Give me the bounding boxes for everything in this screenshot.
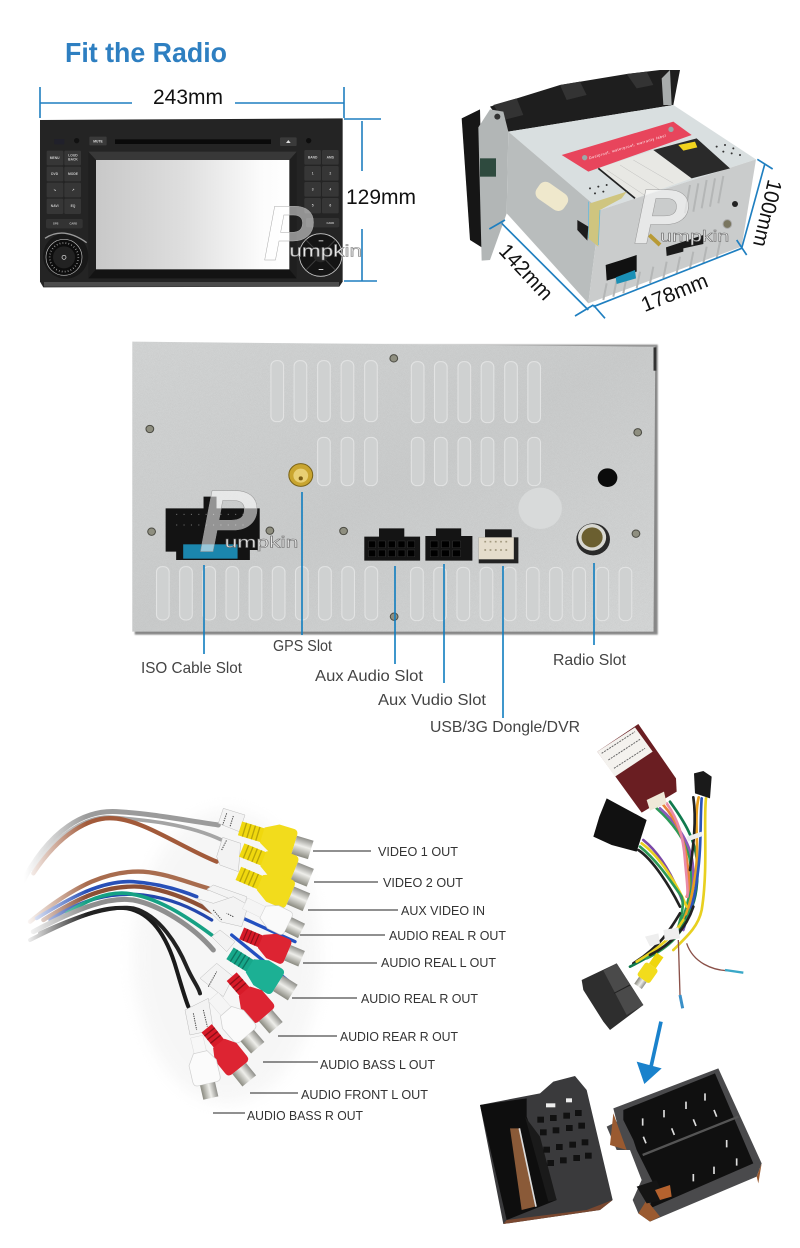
watermark: Pumpkin: P: [263, 189, 314, 277]
RCA plug: aux video white: [239, 892, 307, 942]
wires: [630, 797, 706, 967]
dimension lines on unit: [489, 159, 773, 318]
wiring harness photo: [480, 724, 762, 1224]
white wire tags: [185, 808, 248, 1035]
radio socket: [576, 523, 610, 555]
aux video socket: [425, 528, 472, 561]
watermark: Pumpkin: umpkin: [660, 229, 729, 246]
cable label: AUDIO FRONT L OUT: AUDIO FRONT L OUT: [301, 1088, 428, 1102]
callout line and label: Radio Slot: Radio Slot: [553, 652, 627, 669]
callout line and label: ISO Cable Slot: [141, 565, 243, 677]
left button block: [46, 151, 83, 228]
ISO socket: [166, 497, 260, 560]
right button block: CARD: [326, 221, 334, 225]
right button block: 2: [329, 172, 331, 176]
watermark: Pumpkin: [263, 189, 362, 277]
pale sticker circle: [518, 488, 562, 529]
title: Fit the Radio: [65, 37, 227, 68]
left button block: MODE: [68, 172, 79, 176]
white plug on side: [533, 179, 571, 214]
watermark: Pumpkin: [199, 473, 298, 571]
RCA plug: video 2 yellow: [236, 836, 316, 892]
cable label: AUDIO BASS L OUT: AUDIO BASS L OUT: [320, 1058, 435, 1072]
left button block: NAVI: [51, 204, 59, 208]
left button block: LOUD: [68, 154, 78, 158]
callout line and label: Radio Slot: [553, 563, 627, 669]
head unit front photo: [40, 118, 362, 287]
rear sockets: [666, 235, 703, 256]
callout line and label: Aux Audio Slot: Aux Audio Slot: [315, 668, 424, 685]
RCA plug: yellow third: [232, 859, 312, 916]
black hole: [598, 468, 617, 487]
navigation pad: [299, 234, 342, 276]
GPS gold connector: [289, 464, 313, 486]
RCA plug: audio white bottom: [183, 1034, 224, 1101]
close-up plug right: [607, 1068, 762, 1222]
volume knob: [43, 233, 88, 279]
left button block: EQ: [71, 204, 76, 208]
callout line and label: USB/3G Dongle/DVR: USB/3G Dongle/DVR: [430, 719, 580, 736]
watermark: Pumpkin: P: [633, 172, 689, 260]
yellow RCA: [632, 951, 666, 991]
head unit front photo: MUTE: [93, 139, 103, 143]
screen bezel: [88, 152, 297, 278]
cable label: VIDEO 2 OUT: VIDEO 2 OUT: [383, 876, 463, 890]
side face: [507, 132, 600, 303]
foam edge stack: [588, 192, 627, 247]
dimension: height 129mm: 129mm: [346, 186, 416, 209]
cable label: AUDIO REAL R OUT: AUDIO REAL R OUT: [389, 929, 506, 943]
dimension: width 243mm: 243mm: [153, 86, 223, 109]
left button block: GPS: [53, 222, 59, 226]
right button block: [304, 150, 339, 227]
callout line and label: ISO Cable Slot: ISO Cable Slot: [141, 660, 243, 677]
screws: [146, 355, 642, 620]
left button block: DVD: [51, 172, 59, 176]
right button block: AMS: [327, 156, 335, 160]
RCA plug: audio red bottom: [196, 1020, 260, 1090]
top face: [508, 105, 756, 210]
tag print marks: [193, 813, 233, 1030]
RCA plug: audio white lower: [203, 988, 268, 1057]
cable label: AUDIO REAR R OUT: AUDIO REAR R OUT: [340, 1030, 458, 1044]
small black plug: [694, 771, 712, 798]
callout line and label: GPS Slot: GPS Slot: [273, 638, 332, 655]
left button block: BACK: [68, 157, 78, 161]
control module box: [597, 724, 677, 813]
right button block: 4: [329, 188, 331, 192]
cable label: VIDEO 1 OUT: VIDEO 1 OUT: [378, 845, 458, 859]
dimension label: 100mm: 100mm: [748, 177, 786, 249]
dimension label: 142mm: 142mm: [494, 240, 557, 305]
GPS antenna: [649, 235, 660, 245]
USB white socket: [479, 529, 518, 563]
right button block: 1: [312, 172, 314, 176]
watermark: Pumpkin: umpkin: [289, 242, 362, 261]
RCA plug: audio green: [222, 941, 300, 1005]
black plug upper: [593, 798, 647, 852]
small side slot: [577, 220, 588, 241]
rear face: [588, 159, 756, 303]
aux audio socket: [364, 528, 420, 561]
RCA cable photo: [0, 790, 320, 1103]
big arrow: [637, 1022, 662, 1084]
RCA plug: audio red lower: [221, 968, 287, 1037]
dimension: width 243mm: [40, 86, 344, 118]
spec labels: [598, 150, 692, 198]
rear panel photo: [132, 342, 658, 635]
left button block: ↘: [53, 188, 56, 192]
cable label: AUDIO REAL L OUT: AUDIO REAL L OUT: [381, 956, 496, 970]
right button block: 5: [312, 204, 314, 208]
right button block: 6: [329, 204, 331, 208]
left button block: CARD: [69, 222, 77, 226]
vent slots: [157, 361, 632, 621]
RCA plug: video 1 yellow: [236, 814, 315, 865]
right button block: 3: [312, 188, 314, 192]
watermark: Pumpkin: P: [199, 473, 257, 571]
ISO connector on rear: [606, 255, 637, 281]
cable ties: [645, 832, 703, 947]
unit 3D photo: Dustproof, waterproof, warranty label: [588, 134, 667, 160]
right button block: BAND: [308, 156, 318, 160]
wires: [20, 812, 295, 1007]
callout line and label: Aux Audio Slot: [315, 566, 424, 685]
dimension label: 178mm: 178mm: [638, 269, 711, 317]
RCA plug: audio red: [236, 921, 307, 971]
callout line and label: Aux Vudio Slot: Aux Vudio Slot: [378, 692, 487, 709]
red warning sticker: [562, 122, 692, 172]
left button block: ↗: [72, 188, 75, 192]
screen: [96, 160, 289, 269]
thin brown antenna leads: [678, 940, 743, 1008]
close-up plug left: [480, 1076, 613, 1224]
unit 3D photo: [462, 70, 773, 318]
cable label: AUDIO BASS R OUT: AUDIO BASS R OUT: [247, 1109, 363, 1123]
cable label: AUX VIDEO IN: AUX VIDEO IN: [401, 904, 485, 918]
watermark: Pumpkin: [633, 172, 729, 260]
car harness plug: [582, 963, 643, 1030]
dimension: height 129mm: [344, 119, 416, 281]
watermark: Pumpkin: umpkin: [225, 534, 298, 551]
left button block: MENU: [50, 156, 60, 160]
cable label: AUDIO REAL R OUT second: AUDIO REAL R OUT: [361, 992, 478, 1006]
